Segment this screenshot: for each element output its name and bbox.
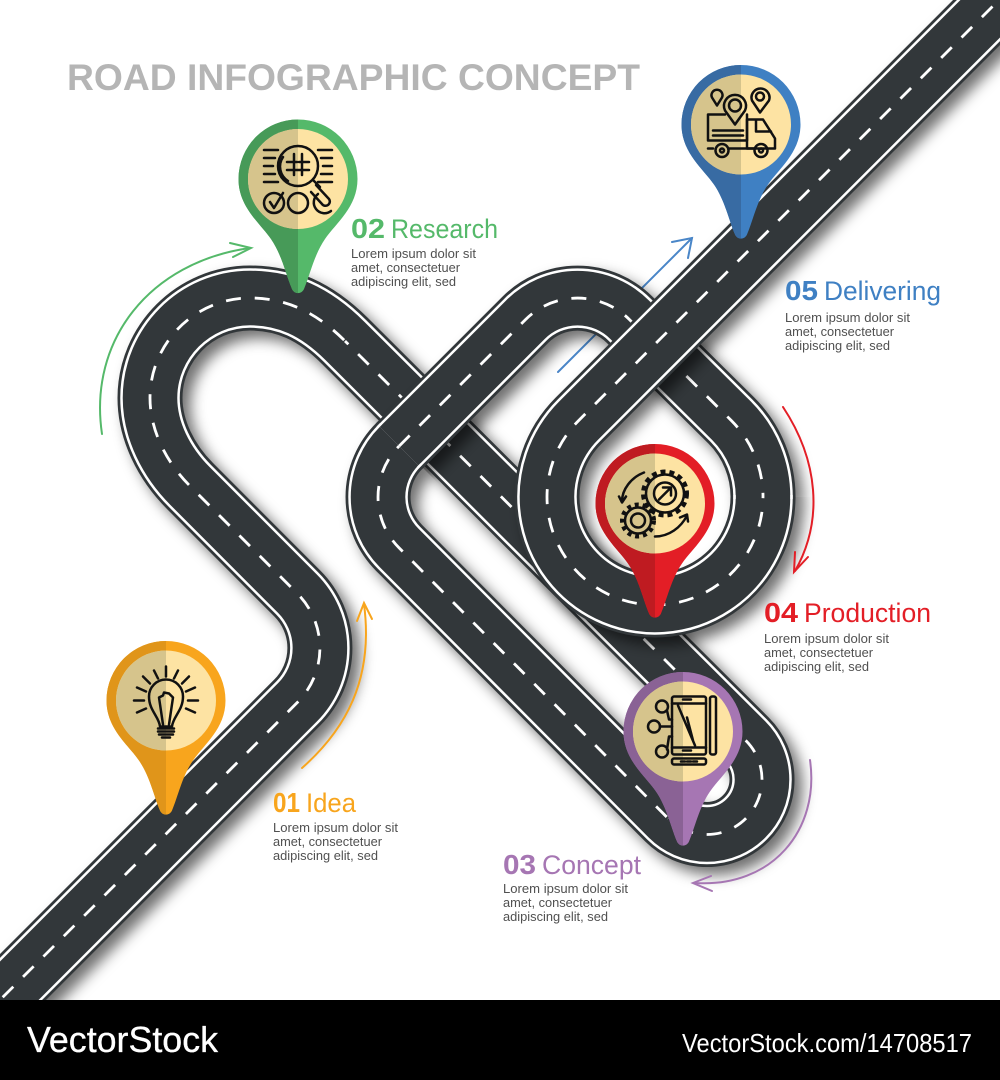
pin: 01 idea [106, 641, 226, 815]
arrow: 05 delivering [558, 238, 692, 372]
label: 05 delivering: adipiscing elit, sed [785, 339, 890, 353]
label: 02 research: adipiscing elit, sed [351, 275, 456, 289]
arrow: 01 idea [302, 603, 372, 768]
label: 02 research [351, 213, 498, 289]
label: 01 idea: Idea [306, 788, 357, 818]
label: 03 concept: Lorem ipsum dolor sit [503, 882, 629, 896]
label: 01 idea: 01 [273, 787, 300, 818]
icon: light bulb [134, 666, 198, 738]
arrow: 04 production [783, 407, 813, 572]
label: 03 concept: Concept [542, 850, 641, 880]
footer band: VectorStock [27, 1019, 219, 1060]
label: 04 production: amet, consectetuer [764, 646, 873, 660]
label: 02 research: Research [391, 214, 498, 244]
label: 05 delivering: 05 [785, 275, 818, 306]
road: lower winding section [0, 298, 770, 1028]
label: 05 delivering: amet, consectetuer [785, 325, 894, 339]
icon: delivery truck [708, 89, 775, 157]
title: ROAD INFOGRAPHIC CONCEPT [67, 56, 640, 98]
footer band: VectorStock.com/14708517 [682, 1028, 972, 1058]
arrow: 03 concept [693, 760, 811, 891]
label: 05 delivering: Delivering [824, 276, 941, 306]
arrow: 02 research [100, 243, 251, 434]
label: 05 delivering [785, 275, 941, 353]
label: 02 research: 02 [351, 213, 385, 244]
pin: 05 delivering [682, 65, 800, 239]
road: middle section [377, 298, 771, 507]
label: 01 idea [273, 787, 399, 863]
label: 01 idea: adipiscing elit, sed [273, 849, 378, 863]
label: 03 concept: 03 [503, 849, 536, 880]
label: 02 research: Lorem ipsum dolor sit [351, 247, 477, 261]
icon: magnifier and checks [264, 146, 332, 213]
icon: phone and nodes [648, 696, 716, 764]
label: 03 concept: amet, consectetuer [503, 896, 612, 910]
road: loop and exit section [547, 0, 1000, 613]
label: 01 idea: amet, consectetuer [273, 835, 382, 849]
label: 04 production: 04 [764, 597, 798, 628]
label: 02 research: amet, consectetuer [351, 261, 460, 275]
icon: gears [619, 472, 688, 536]
label: 03 concept: adipiscing elit, sed [503, 910, 608, 924]
label: 04 production: adipiscing elit, sed [764, 660, 869, 674]
pin: 02 research [238, 120, 358, 293]
label: 04 production [764, 597, 931, 674]
label: 03 concept [503, 849, 641, 924]
label: 05 delivering: Lorem ipsum dolor sit [785, 311, 911, 325]
footer band [0, 1000, 1000, 1080]
pin: 03 concept [624, 672, 742, 846]
label: 04 production: Lorem ipsum dolor sit [764, 632, 890, 646]
label: 04 production: Production [804, 598, 931, 628]
pin: 04 production [596, 444, 714, 618]
label: 01 idea: Lorem ipsum dolor sit [273, 821, 399, 835]
